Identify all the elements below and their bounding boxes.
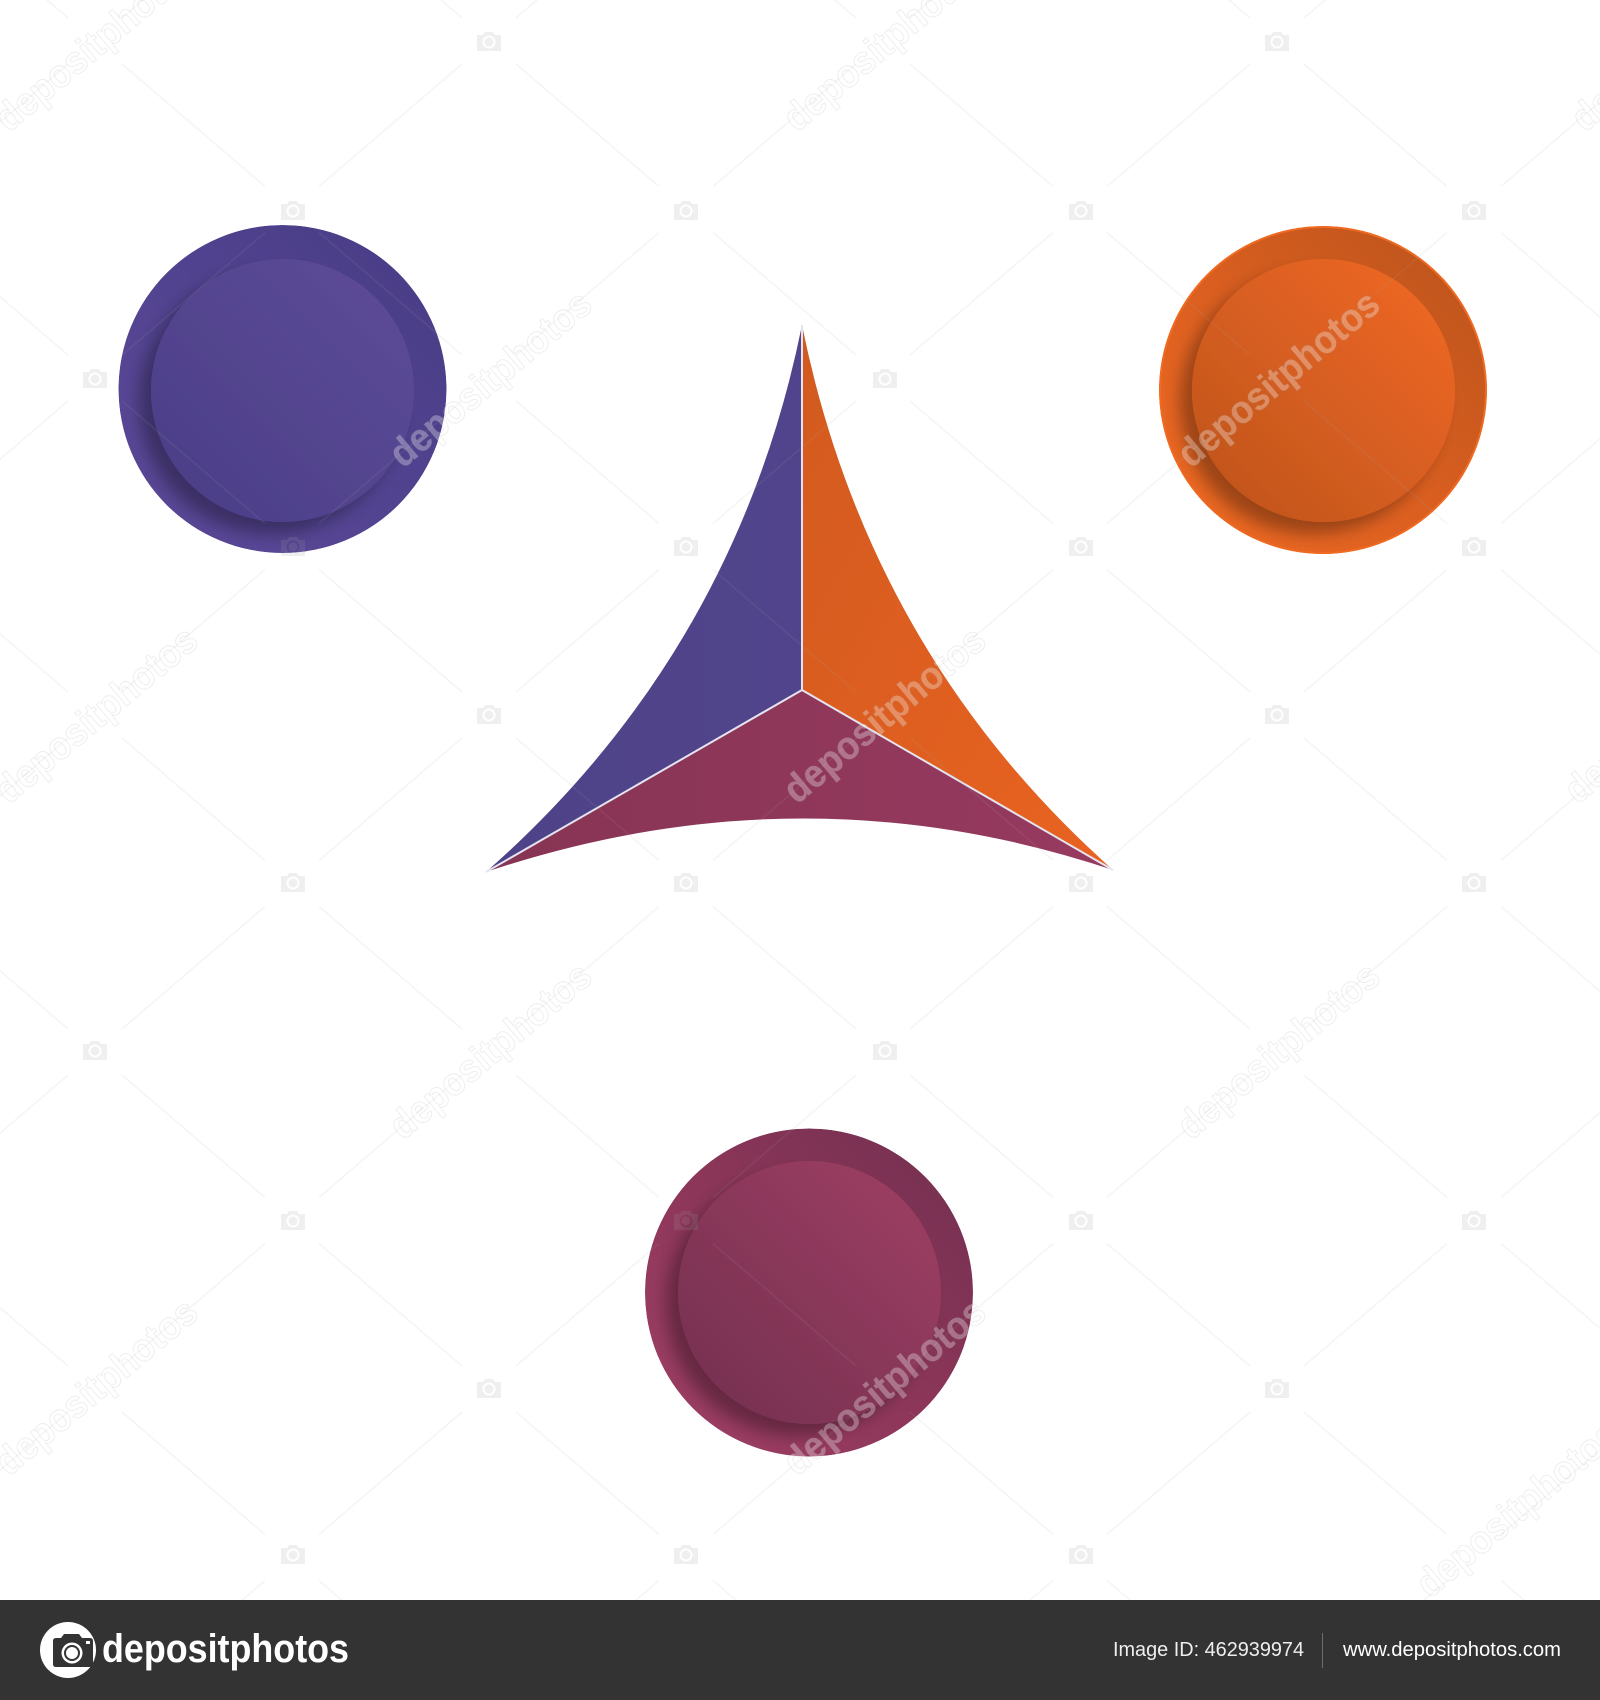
image id: Image ID: 462939974 (1113, 1639, 1304, 1661)
circle: orange (1159, 226, 1487, 554)
segment dividers (486, 325, 1113, 872)
logo wordmark: depositphotos (102, 1627, 349, 1671)
footer band (0, 1600, 1600, 1700)
segment: orange (802, 325, 1113, 870)
website url: www.depositphotos.com (1342, 1639, 1561, 1661)
circle: maroon (645, 1128, 973, 1456)
watermark text: depositphotos (775, 1290, 994, 1484)
watermark text: depositphotos (1169, 954, 1388, 1148)
watermark text: depositphotos (381, 282, 600, 476)
watermark camera icons (83, 32, 1486, 1564)
segment: maroon (486, 690, 1113, 872)
icon: logo camera (40, 1622, 96, 1678)
watermark text: depositphotos (1169, 282, 1388, 476)
central curved triangle (486, 325, 1113, 872)
watermark text: depositphotos (381, 954, 600, 1148)
circle: purple (118, 225, 446, 553)
watermark text: depositphotos (775, 618, 994, 812)
segment: purple (486, 325, 802, 872)
